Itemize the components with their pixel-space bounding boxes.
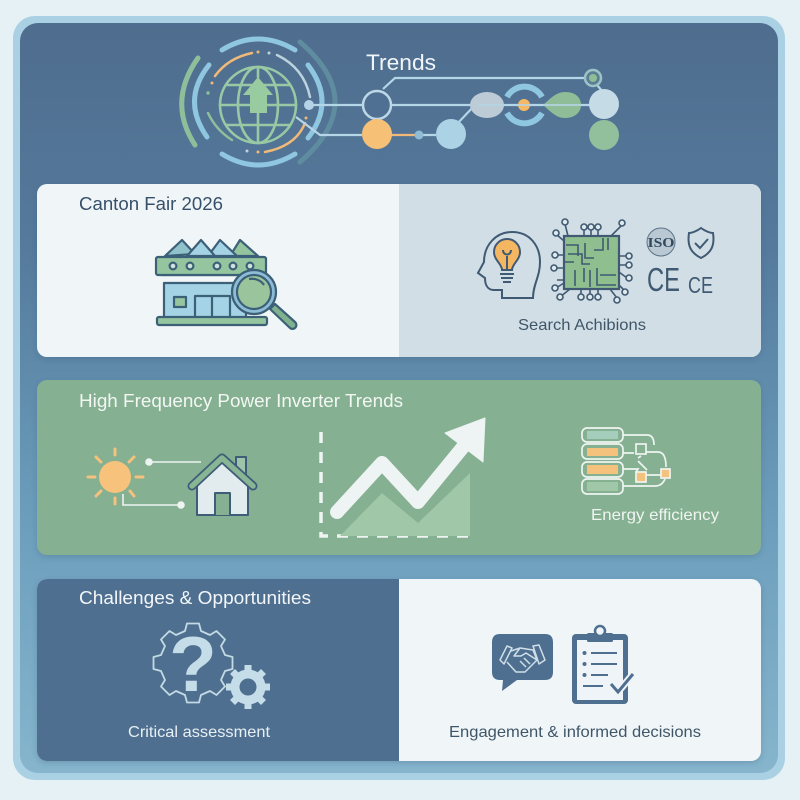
icon: question gear: ? <box>169 620 217 708</box>
heading: Challenges & Opportunities: Challenges & Opportunities <box>79 588 311 608</box>
header graphic: globe and network <box>182 39 619 165</box>
icon: handshake speech bubble <box>492 634 553 691</box>
icon: CE marks <box>647 261 713 298</box>
heading: Canton Fair 2026: Canton Fair 2026 <box>79 194 223 214</box>
caption: Critical assessment: Critical assessment <box>128 724 271 741</box>
caption: Search Achibions: Search Achibions <box>518 317 646 334</box>
icon: ISO badge: ISO <box>648 236 675 251</box>
icon: CE marks: CE <box>647 261 680 298</box>
heading: Trends: Trends <box>366 50 436 75</box>
icon: head with light bulb <box>478 232 540 298</box>
panel: Challenges & Opportunities <box>37 579 761 761</box>
icon: shield check <box>688 228 714 258</box>
icon: battery stack with circuit <box>582 428 670 494</box>
icon: house <box>192 457 253 515</box>
icon: ISO badge <box>647 228 675 256</box>
icon: circuit chip <box>551 219 632 303</box>
icon: question gear <box>154 620 232 708</box>
icon: sun <box>88 449 143 504</box>
icon: clipboard checklist <box>572 626 633 704</box>
icon: CE marks: CE <box>688 272 713 298</box>
network lines and nodes <box>296 78 603 135</box>
caption: Energy efficiency: Energy efficiency <box>591 507 719 524</box>
chart: rising trend <box>321 418 485 536</box>
icon: globe with rings <box>182 39 335 165</box>
caption: Engagement & informed decisions: Engagement & informed decisions <box>449 724 701 741</box>
panel: Canton Fair 2026 <box>37 184 761 357</box>
icon: small gear <box>226 665 270 709</box>
panel: High Frequency Power Inverter Trends <box>37 380 761 555</box>
heading: High Frequency Power Inverter Trends: High Frequency Power Inverter Trends <box>79 391 403 411</box>
icon: exhibition hall with magnifier <box>156 240 296 329</box>
connector lines sun to house <box>123 459 201 508</box>
